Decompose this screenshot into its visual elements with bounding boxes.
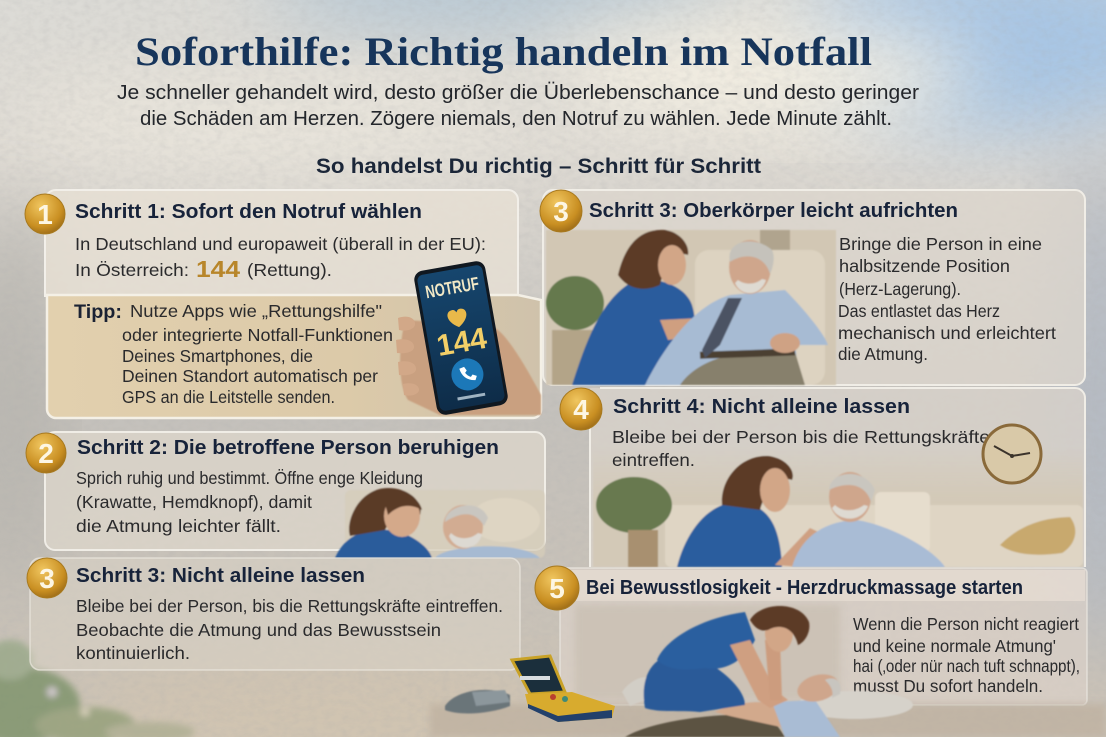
- tip box: Tipp:: [74, 302, 122, 323]
- badge: 2: 2: [38, 438, 54, 469]
- heading band: Schritt 5: [570, 570, 1085, 601]
- tip box: GPS an die Leitstelle senden.: [122, 387, 335, 407]
- body: Schritt 4: [612, 427, 990, 470]
- body: Schritt 3 right: die Atmung.: [838, 344, 928, 364]
- badge: 3 right: 3: [553, 196, 569, 227]
- illustration: nurse calming patient: [335, 488, 545, 558]
- body: Schritt 2: (Krawatte, Hemdknopf), damit: [76, 492, 312, 512]
- intro text: die Schäden am Herzen. Zögere niemals, den Notruf zu wählen. Jede Minute zählt.: [140, 108, 892, 130]
- intro text: [117, 82, 919, 130]
- icon: wall clock: [983, 425, 1041, 483]
- icon: hand holding smartphone: [396, 260, 541, 416]
- badge: 5: 5: [549, 573, 565, 604]
- panel: Schritt 1: [25, 190, 541, 418]
- illustration: nurse with half-seated patient: [546, 230, 836, 385]
- body: Schritt 3 right: Bringe die Person in eine: [839, 234, 1042, 254]
- heading: Schritt 2: Schritt 2: Die betroffene Person beruhigen: [77, 437, 499, 459]
- heading: Schritt 4: Schritt 4: Nicht alleine lassen: [613, 396, 910, 418]
- tip box: [47, 295, 541, 418]
- emergency number text: In Österreich:: [75, 260, 189, 280]
- panel: Schritt 3 left: [27, 558, 520, 670]
- section heading: So handelst Du richtig – Schritt für Schritt: [316, 155, 761, 178]
- panel: Schritt 4: [560, 388, 1085, 567]
- body: Schritt 5: und keine normale Atmung': [853, 636, 1056, 656]
- emergency number text: 144: [196, 256, 240, 282]
- badge: 3 left: [27, 558, 67, 598]
- icon: AED defibrillator case: [512, 656, 615, 722]
- icon: monitor device with cables: [445, 690, 510, 713]
- decorative plants bottom left: [0, 640, 195, 737]
- icon: hand holding smartphone: 144: [434, 322, 490, 363]
- tip box: Deines Smartphones, die: [122, 346, 313, 366]
- body: Schritt 5: Wenn die Person nicht reagiert: [853, 614, 1079, 634]
- badge: 1: [25, 194, 65, 234]
- body: Schritt 3 right: mechanisch und erleichtert: [838, 323, 1056, 343]
- title: Soforthilfe: Richtig handeln im Notfall: [135, 29, 872, 74]
- tip box: Deinen Standort automatisch per: [122, 366, 378, 386]
- tip box: oder integrierte Notfall-Funktionen: [122, 325, 393, 345]
- body: Schritt 3 right: (Herz-Lagerung).: [839, 279, 961, 299]
- panel: Schritt 5: [535, 566, 1087, 705]
- body: Schritt 2: [76, 468, 423, 536]
- panel: Schritt 3 right: [540, 190, 1085, 385]
- body: Schritt 2: Sprich ruhig und bestimmt. Öffne enge Kleidung: [76, 468, 423, 488]
- tip box: Nutze Apps wie „Rettungshilfe": [130, 301, 382, 321]
- illustration: floor and background of CPR scene: [430, 605, 1106, 737]
- body: Schritt 3: Bleibe bei der Person, bis die Rettungskräfte eintreffen.: [76, 596, 503, 616]
- badge: 2: [26, 433, 66, 473]
- heading: Schritt 1: Schritt 1: Sofort den Notruf wählen: [75, 201, 422, 223]
- body: Schritt 3: kontinuierlich.: [76, 643, 190, 663]
- body: Schritt 3: Beobachte die Atmung und das Bewusstsein: [76, 620, 441, 640]
- emergency number text: In Deutschland und europaweit (überall in der EU):: [75, 234, 486, 254]
- badge: 4: 4: [573, 394, 589, 425]
- body: Schritt 3 right: [838, 234, 1056, 364]
- illustration: nurse giving chest compressions to patient: [622, 606, 913, 737]
- heading: Schritt 3 right: Schritt 3: Oberkörper leicht aufrichten: [589, 200, 958, 222]
- icon: hand holding smartphone: NOTRUF: [424, 273, 480, 302]
- emergency number text: [75, 234, 486, 282]
- heading: Schritt 3: Schritt 3: Nicht alleine lassen: [76, 565, 365, 587]
- badge: 1: 1: [37, 199, 53, 230]
- badge: 3 left: 3: [39, 563, 55, 594]
- badge: 4: [560, 388, 602, 430]
- body: Schritt 3 right: halbsitzende Position: [839, 256, 1010, 276]
- intro text: Je schneller gehandelt wird, desto größer die Überlebenschance – und desto geringer: [117, 82, 919, 104]
- heading band: Schritt 5: Bei Bewusstlosigkeit - Herzdruckmassage starten: [586, 577, 1023, 599]
- badge: 3 right: [540, 190, 582, 232]
- body: Schritt 5: [853, 614, 1080, 696]
- body: Schritt 4: eintreffen.: [612, 450, 695, 470]
- illustration: nurse beside lying patient: [593, 445, 1083, 567]
- body: Schritt 3: [76, 596, 503, 663]
- badge: 5: [535, 566, 579, 610]
- body: Schritt 3 right: Das entlastet das Herz: [838, 301, 1000, 321]
- body: Schritt 2: die Atmung leichter fällt.: [76, 516, 281, 536]
- body: Schritt 5: musst Du sofort handeln.: [853, 676, 1043, 696]
- body: Schritt 4: Bleibe bei der Person bis die Rettungskräfte: [612, 427, 990, 447]
- panel: Schritt 2: [26, 432, 545, 558]
- emergency number text: (Rettung).: [247, 260, 332, 280]
